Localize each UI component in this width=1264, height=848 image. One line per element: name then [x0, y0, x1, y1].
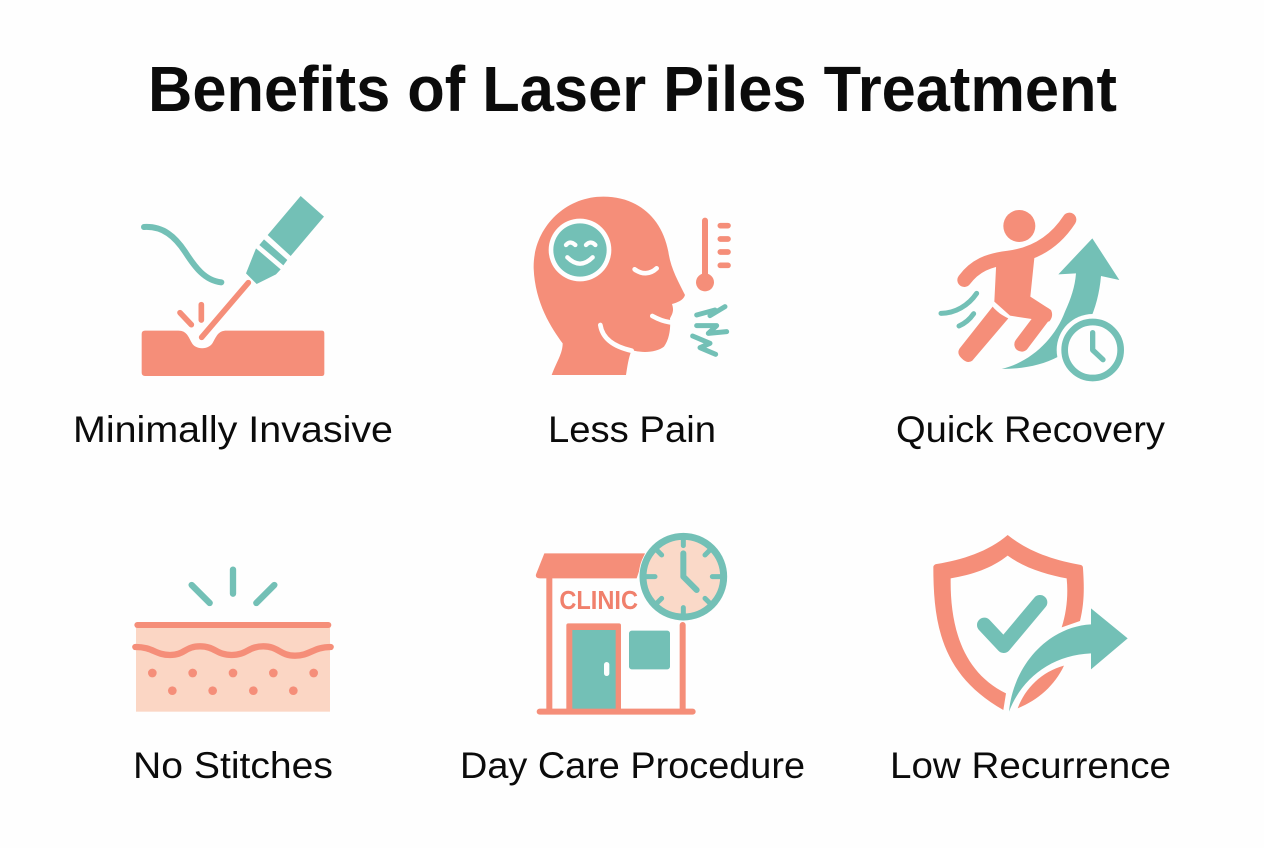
label: Low Recurrence — [890, 745, 1171, 786]
skin block with notch — [142, 331, 324, 376]
smiley badge — [549, 219, 611, 281]
panel: less pain — [534, 197, 728, 450]
title: Benefits of Laser Piles Treatment — [148, 53, 1117, 125]
icon: shield with check and arrow — [933, 535, 1128, 712]
clinic sign: CLINIC — [559, 587, 638, 615]
icon: clinic with clock — [536, 532, 728, 712]
walls and floor — [540, 578, 693, 712]
skin layer — [136, 626, 330, 712]
runner — [1003, 210, 1035, 242]
label: No Stitches — [133, 745, 333, 786]
sparks — [180, 305, 201, 325]
shield — [933, 535, 1084, 710]
head silhouette — [534, 197, 685, 375]
door — [566, 623, 621, 710]
label: Day Care Procedure — [460, 745, 805, 786]
window — [629, 631, 670, 669]
panel: quick recovery — [896, 210, 1166, 450]
panel: day care procedure — [460, 532, 805, 786]
label: Minimally Invasive — [73, 409, 393, 450]
pain zigzags — [693, 307, 727, 354]
speed lines — [941, 293, 977, 326]
panel: minimally invasive — [73, 196, 393, 450]
clock — [1057, 314, 1129, 386]
arrow — [1009, 608, 1128, 712]
roof — [536, 553, 645, 578]
eye, mouth and jaw lines — [600, 268, 670, 351]
icon: head with smile and thermometer — [534, 197, 728, 375]
laser pen body — [246, 196, 324, 284]
rising arrow — [1002, 238, 1119, 369]
dots — [148, 669, 318, 695]
panel: low recurrence — [890, 535, 1171, 786]
rays — [192, 570, 274, 603]
check mark — [984, 602, 1040, 646]
thermometer — [696, 221, 714, 280]
shield fragment — [1018, 666, 1064, 708]
clock — [639, 532, 728, 621]
icon: healed skin layers — [135, 570, 331, 712]
laser beam — [202, 283, 248, 337]
panel: no stitches — [133, 570, 333, 786]
icon: laser pen on skin — [142, 196, 324, 376]
motion curve — [144, 227, 221, 282]
surface line — [137, 616, 328, 634]
label: Quick Recovery — [896, 409, 1166, 450]
wavy line — [135, 646, 331, 656]
icon: running person with arrow and clock — [941, 210, 1129, 386]
label: Less Pain — [548, 409, 716, 450]
